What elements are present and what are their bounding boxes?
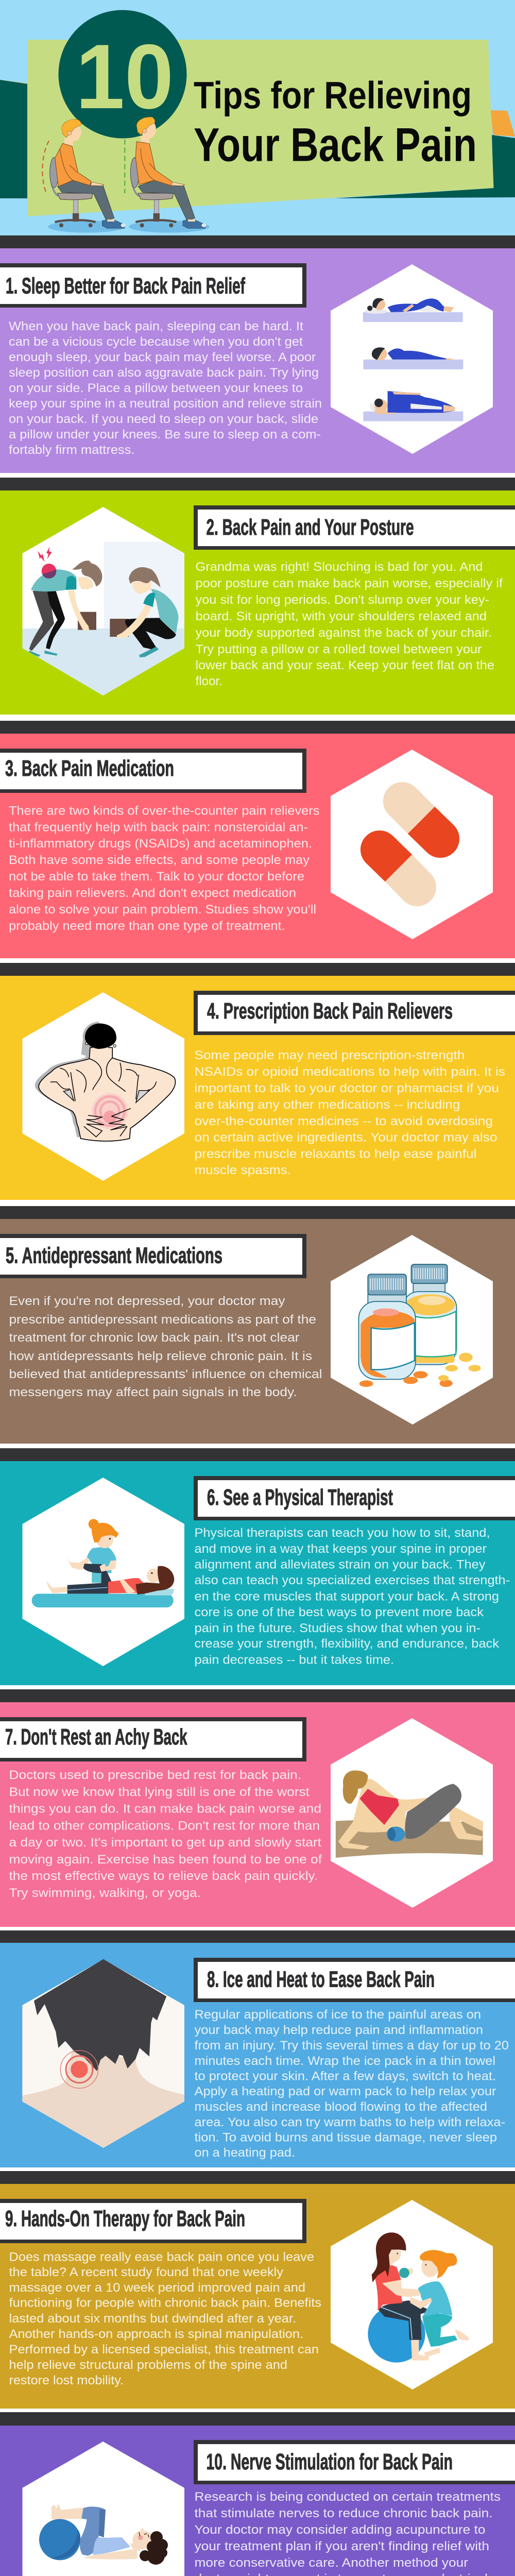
body text: tip 3: alone to solve your pain problem. Studies show you'll [9,903,316,917]
body text: tip 9: lasted about six months but dwindled after a year. [9,2312,296,2326]
body text: tip 5: Even if you're not depressed, your doctor may [9,1294,285,1308]
body text: tip 1: a pillow under your knees. Be sure to sleep on a com- [9,428,321,442]
body text: tip 2: you sit for long periods. Don't slump over your key- [196,593,489,607]
heading: tip 1 [0,263,306,308]
illustration: sleeping positions [331,264,493,454]
body text: tip 1: can be a vicious cycle because when you don't get [9,335,303,349]
heading: tip 1: 1. Sleep Better for Back Pain Relief [6,273,245,299]
body text: tip 8: Apply a heating pad or warm pack to help relax your [195,2084,496,2098]
body text: tip 10: Research is being conducted on certain treatments [195,2490,501,2504]
body text: tip 5: messengers may affect pain signals in the body. [9,1385,297,1399]
body text: tip 8: to protect your skin. After a few days, switch to heat. [195,2070,496,2083]
body text: tip 10: Your doctor may consider adding acupuncture to [195,2523,485,2537]
illustration: therapist stretching patient [23,1478,184,1666]
heading: tip 7 [0,1717,306,1761]
body text: tip 7: moving again. Exercise has been found to be one of [9,1853,322,1867]
illustration: capsules [331,750,493,939]
body text: tip 4: over-the-counter medicines -- to avoid overdosing [195,1114,493,1128]
heading: tip 6: 6. See a Physical Therapist [207,1485,393,1510]
heading: tip 8 [194,1958,515,2002]
body text: tip 9 [9,2250,321,2387]
body text: tip 3 [9,804,319,933]
body text: tip 3: that frequently help with back pain: nonsteroidal an- [9,820,308,835]
body text: tip 5 [9,1294,322,1399]
body text: tip 9: Another hands-on approach is spinal manipulation. [9,2327,303,2341]
body text: tip 3: probably need more than one type of treatment. [9,919,285,933]
body text: tip 8: Regular applications of ice to the painful areas on [195,2008,481,2022]
body text: tip 8: muscles and increase blood flowing to the affected [195,2100,487,2114]
title [194,74,477,171]
body text: tip 10: that stimulate nerves to reduce chronic back pain. [195,2506,492,2520]
body text: tip 8: tion. To avoid burns and tissue damage, never sleep [195,2131,497,2145]
body text: tip 2: your body supported against the back of your chair. [196,626,492,640]
body text: tip 9: the table? A recent study found that one weekly [9,2265,283,2279]
body text: tip 6: and move in a way that keeps your spine in proper [195,1542,487,1556]
body text: tip 6: pain decreases -- but it takes time. [195,1653,394,1667]
illustration: man holding lower back [23,992,184,1181]
body text: tip 5: treatment for chronic low back pain. It's not clear [9,1331,300,1345]
body text: tip 3: not be able to take them. Talk to your doctor before [9,870,304,884]
panel: tip 6 physical therapist [0,1461,515,1685]
body text: tip 8 [195,2008,509,2160]
body text: tip 2: board. Sit upright, with your shoulders relaxed and [196,609,487,623]
body text: tip 7: things you can do. It can make back pain worse and [9,1802,321,1816]
body text: tip 10 [195,2490,506,2576]
body text: tip 1: keep your spine in a neutral position and relieve strain [9,397,322,411]
illustration: woman on foam roller [331,1718,493,1908]
body text: tip 1: sleep position can also aggravate back pain. Try lying [9,366,319,380]
body text: tip 6: en the core muscles that support your back. A strong [195,1590,499,1603]
body text: tip 1: on your back. If you need to sleep on your back, slide [9,412,318,426]
body text: tip 6: alignment and alleviates strain on your back. They [195,1558,485,1572]
body text: tip 3: ti-inflammatory drugs (NSAIDs) and acetaminophen. [9,837,312,851]
body text: tip 3: Both have some side effects, and some people may [9,853,310,867]
body text: tip 7: the most effective ways to relieve back pain quickly. [9,1869,318,1883]
body text: tip 7: a day or two. It's important to get up and slowly start [9,1836,321,1850]
heading: tip 7: 7. Don't Rest an Achy Back [5,1724,187,1750]
header banner [0,0,515,235]
body text: tip 4: muscle spasms. [195,1163,291,1177]
body text: tip 7: lead to other complications. Don't rest for more than [9,1819,320,1833]
body text: tip 4 [195,1048,505,1177]
body text: tip 7: Try swimming, walking, or yoga. [9,1886,201,1900]
panel: tip 7 achy back [0,1702,515,1927]
panel: tip 5 antidepressants [0,1219,515,1444]
body text: tip 10: more conservative care. Another method your [195,2556,468,2570]
body text: tip 6: Physical therapists can teach you how to sit, stand, [195,1526,490,1540]
body text: tip 8: on a heating pad. [195,2146,295,2160]
body text: tip 8: minutes each time. Wrap the ice pack in a thin towel [195,2054,495,2068]
body text: tip 2: lower back and your seat. Keep your feet flat on the [196,658,494,672]
heading: tip 5 [0,1234,306,1278]
body text: tip 1: enough sleep, your back pain may feel worse. A poor [9,350,316,364]
body text: tip 8: your back may help reduce pain and inflammation [195,2023,483,2037]
heading: tip 5: 5. Antidepressant Medications [6,1243,222,1268]
body text: tip 9: restore lost mobility. [9,2374,124,2387]
body text: tip 2: poor posture can make back pain worse, especially if [196,577,503,590]
body text: tip 5: believed that antidepressants' influence on chemical [9,1367,322,1381]
heading: tip 2 [194,505,515,550]
body text: tip 4: are taking any other medications -- including [195,1098,460,1112]
illustration: slouched and upright sitting posture [42,117,210,233]
panel: tip 4 prescription [0,976,515,1200]
body text: tip 7 [9,1768,322,1900]
heading: tip 3: 3. Back Pain Medication [5,756,174,781]
body text: tip 6: pain in the future. Studies show that when you in- [195,1621,480,1635]
body text: tip 1: fortably firm mattress. [9,443,135,457]
heading: tip 3 [0,749,306,793]
illustration: lifting a box wrong and right [23,507,184,696]
body text: tip 3: taking pain relievers. And don't expect medication [9,886,296,900]
body text: tip 2 [196,560,503,688]
heading: tip 4 [194,991,515,1035]
body text: tip 9: Performed by a licensed specialist, this treatment can [9,2343,319,2357]
body text: tip 6: core is one of the best ways to prevent more back [195,1605,484,1619]
body text: tip 1: When you have back pain, sleeping can be hard. It [9,319,303,333]
body text: tip 3: There are two kinds of over-the-counter pain relievers [9,804,319,818]
body text: tip 9: help relieve structural problems of the spine and [9,2358,287,2372]
panel: tip 3 medication [0,734,515,958]
number badge [59,10,186,138]
body text: tip 9: Does massage really ease back pain once you leave [9,2250,314,2264]
body text: tip 9: massage over a 10 week period improved pain and [9,2281,305,2295]
panel: tip 2 posture [0,490,515,715]
heading: tip 10 [194,2440,515,2484]
body text: tip 1 [9,319,322,457]
body text: tip 6 [195,1526,510,1667]
title: Tips for Relieving [194,74,472,116]
body text: tip 4: on certain active ingredients. Your doctor may also [195,1130,497,1145]
body text: tip 7: But now we know that lying still is one of the worst [9,1785,310,1799]
panel: tip 1 sleep [0,248,515,473]
body text: tip 4: prescribe muscle relaxants to help ease painful [195,1147,477,1161]
number badge: 10 [76,25,174,128]
body text: tip 8: from an injury. Try this several times a day for up to 20 [195,2039,509,2053]
illustration: neck pain target [22,1959,184,2148]
body text: tip 7: Doctors used to prescribe bed rest for back pain. [9,1768,301,1782]
illustration: woman with legs on exercise ball [23,2442,184,2576]
body text: tip 4: NSAIDs or opioid medications to help with pain. It is [195,1065,505,1079]
heading: tip 9: 9. Hands-On Therapy for Back Pain [5,2206,245,2231]
body text: tip 4: important to talk to your doctor or pharmacist if you [195,1081,499,1095]
body text: tip 1: on your side. Place a pillow between your knees to [9,381,303,395]
body text: tip 9: functioning for people with chronic back pain. Benefits [9,2296,321,2310]
panel: tip 10 nerve stimulation [0,2426,515,2576]
body text: tip 10: your treatment plan if you aren't finding relief with [195,2539,489,2553]
illustration: pill bottles [331,1235,493,1425]
body text: tip 5: prescribe antidepressant medications as part of the [9,1313,316,1327]
body text: tip 2: floor. [196,674,222,688]
body text: tip 2: Try putting a pillow or a rolled towel between your [196,642,482,656]
heading: tip 9 [0,2199,306,2243]
panel: tip 9 hands-on therapy [0,2184,515,2409]
heading: tip 6 [194,1476,515,1520]
illustration: therapist with patient on exercise ball [331,2200,493,2389]
body text: tip 6: crease your strength, flexibility, and endurance, back [195,1637,500,1651]
body text: tip 5: how antidepressants help relieve chronic pain. It is [9,1349,312,1363]
panel: tip 8 ice and heat [0,1943,515,2167]
body text: tip 8: area. You also can try warm baths to help with relaxa- [195,2115,505,2129]
body text: tip 2: Grandma was right! Slouching is bad for you. And [196,560,483,574]
body text: tip 4: Some people may need prescription-strength [195,1048,465,1062]
body text: tip 6: also can teach you specialized exercises that strength- [195,1573,510,1587]
